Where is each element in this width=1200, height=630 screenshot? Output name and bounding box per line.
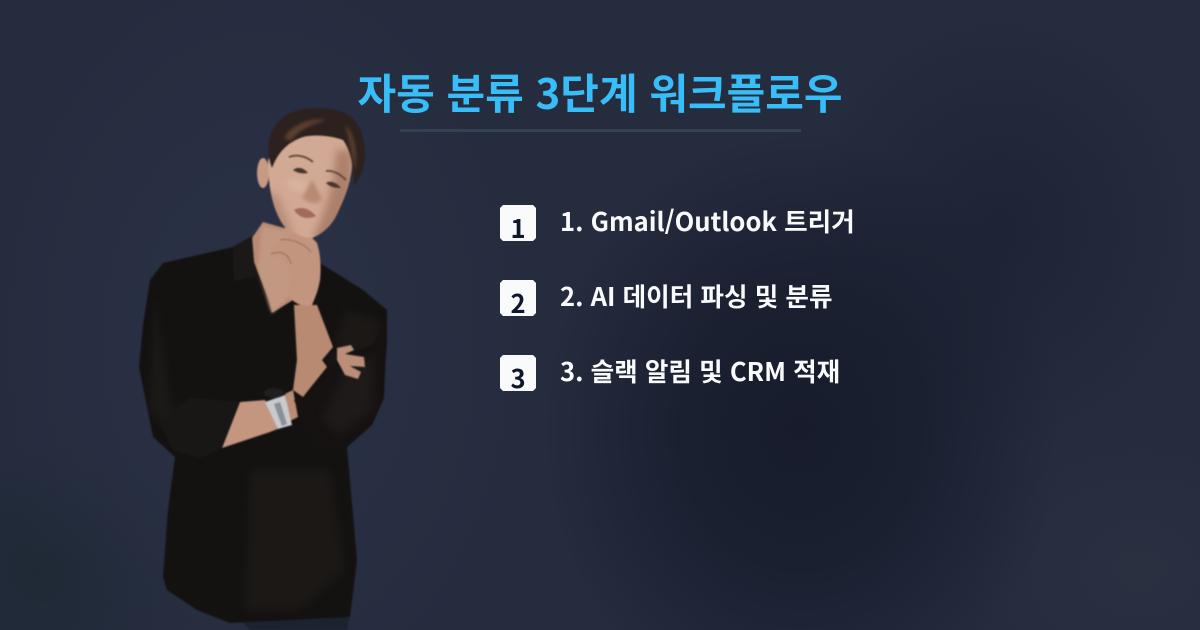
forearm vertical raised	[293, 305, 333, 397]
nose	[302, 180, 322, 203]
mouth	[294, 208, 316, 218]
jeans	[240, 612, 350, 630]
photo: man in black shirt with hand on chin	[138, 108, 388, 630]
badge 3	[500, 355, 536, 391]
face	[267, 134, 353, 238]
fingers on arm	[337, 345, 365, 379]
sleeve cuff left arm	[160, 398, 240, 458]
step 3	[500, 352, 840, 391]
step 1	[500, 202, 855, 241]
badge 1	[500, 205, 536, 241]
title: 자동 분류 3단계 워크플로우	[357, 61, 843, 122]
hand on chin	[270, 225, 321, 306]
shirt	[139, 236, 387, 623]
badge 2	[500, 280, 536, 316]
step 2	[500, 277, 832, 316]
watch	[264, 388, 292, 429]
neck and chest	[252, 222, 320, 313]
collar	[233, 236, 273, 313]
eyes	[293, 168, 308, 173]
hair	[268, 108, 365, 186]
badge 2: 2	[510, 284, 526, 321]
shirt highlights	[150, 300, 380, 610]
badge 1: 1	[510, 209, 526, 246]
step 2 label: 2. AI 데이터 파싱 및 분류	[560, 277, 832, 314]
title underline	[400, 129, 801, 132]
eyebrows	[289, 156, 313, 162]
step 1 label: 1. Gmail/Outlook 트리거	[560, 202, 855, 239]
ear	[257, 158, 269, 188]
sleeve right arm	[294, 322, 387, 448]
step 3 label: 3. 슬랙 알림 및 CRM 적재	[560, 352, 840, 389]
badge 3: 3	[510, 359, 526, 396]
forearm horizontal	[222, 400, 280, 448]
